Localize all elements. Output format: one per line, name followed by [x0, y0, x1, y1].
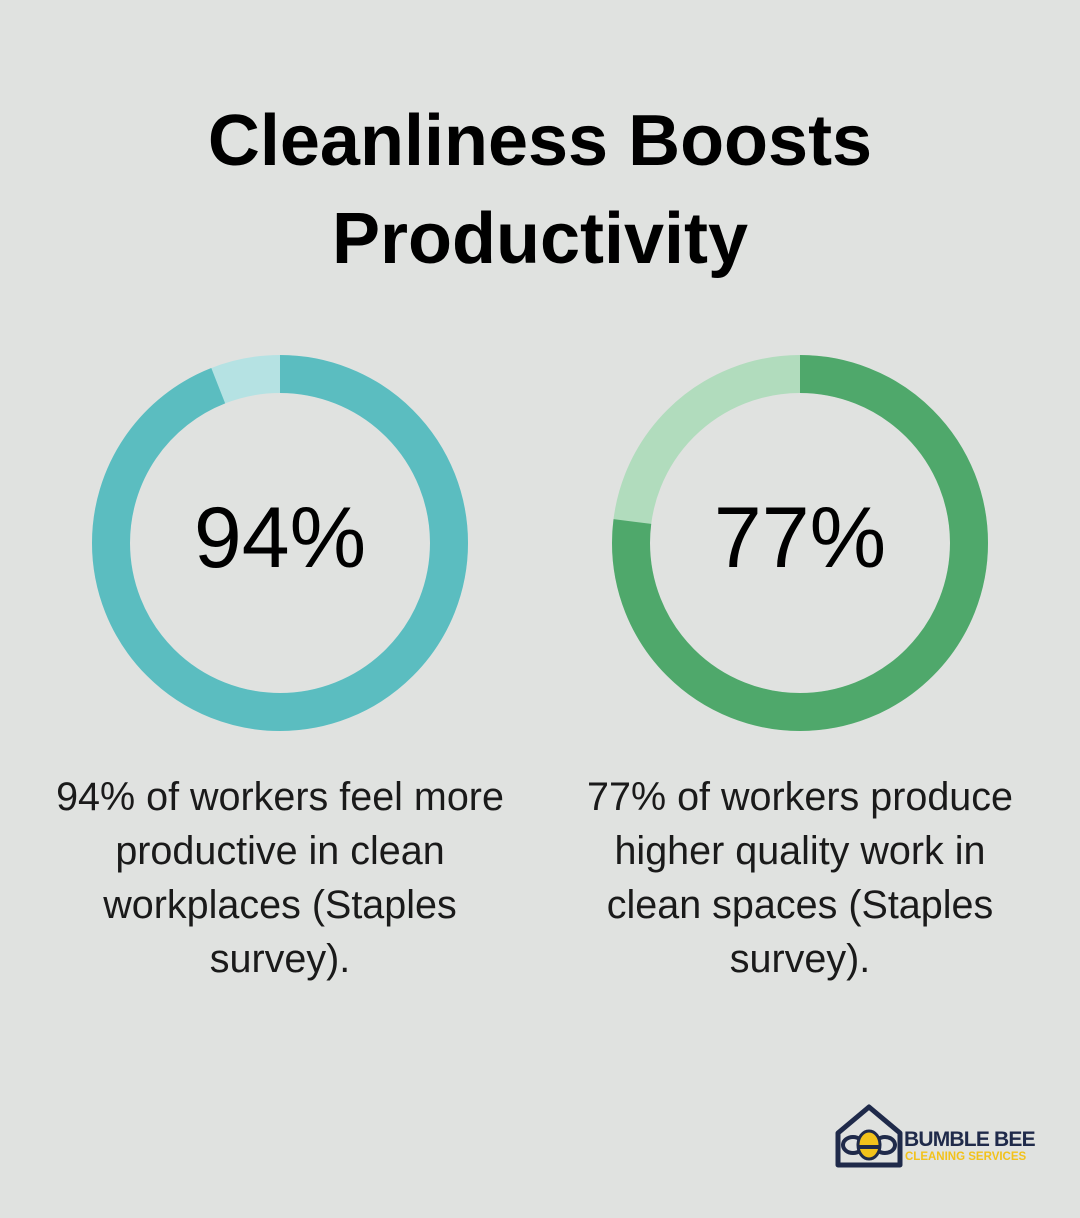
text: 94% description: survey). [210, 937, 350, 981]
icon: bee house [836, 1104, 902, 1168]
number: 94%: 94% [194, 490, 366, 586]
text: 77% description: higher quality work in [614, 829, 986, 873]
text: 77% description: survey). [730, 937, 870, 981]
text: 77% description [587, 775, 1013, 981]
logo: Bumble Bee Cleaning Services [836, 1104, 1035, 1168]
number: 77%: 77% [714, 490, 886, 586]
title: Productivity [332, 199, 748, 279]
title [208, 101, 872, 279]
panel: 77% stat [587, 355, 1013, 981]
logo: Bumble Bee Cleaning Services: CLEANING SERVICES [905, 1151, 1026, 1163]
panel: 94% stat [56, 355, 504, 981]
text: 77% description: clean spaces (Staples [607, 883, 993, 927]
text: 77% description: 77% of workers produce [587, 775, 1013, 819]
logo: Bumble Bee Cleaning Services: BUMBLE BEE [904, 1128, 1035, 1151]
title: Cleanliness Boosts [208, 101, 872, 181]
donut chart: 77% [612, 355, 988, 731]
text: 94% description: 94% of workers feel more [56, 775, 504, 819]
text: 94% description [56, 775, 504, 981]
donut chart: 94% [92, 355, 468, 731]
text: 94% description: productive in clean [115, 829, 445, 873]
text: 94% description: workplaces (Staples [103, 883, 457, 927]
